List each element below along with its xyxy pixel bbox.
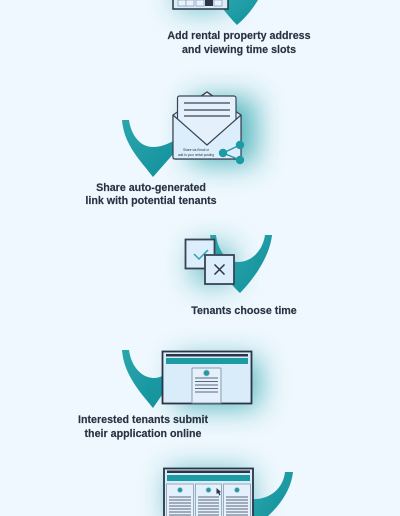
- heading 1: Add rental property address: [167, 30, 311, 42]
- icon: browser with three applicants: [164, 468, 253, 516]
- icon: cursor: [216, 488, 221, 496]
- icon: envelope: [173, 92, 244, 164]
- heading 3: Tenants choose time: [191, 305, 297, 317]
- heading 4: their application online: [85, 428, 202, 440]
- step 4: application: [78, 350, 260, 440]
- icon: calendar monitor: [173, 0, 228, 9]
- heading 4: Interested tenants submit: [78, 414, 208, 426]
- glow 5: [168, 470, 252, 516]
- glow 1: [176, 0, 228, 10]
- glow 2: [190, 98, 256, 164]
- step 5: review applications: [164, 468, 293, 516]
- icon: envelope: Share via Email or: [183, 148, 210, 152]
- glow 4: [176, 358, 260, 408]
- icon: teal swoosh 4: [122, 350, 164, 408]
- icon: teal swoosh 5: [252, 472, 293, 516]
- step 3: choose time: [186, 235, 297, 317]
- icon: check box: [186, 240, 214, 268]
- icon: teal swoosh 3: [210, 235, 272, 293]
- icon: teal swoosh 1: [214, 0, 258, 25]
- icon: teal swoosh 2: [122, 120, 175, 177]
- icon: browser window: [162, 352, 252, 404]
- glow 3: [192, 245, 234, 285]
- heading 2: link with potential tenants: [85, 195, 217, 207]
- icon: share nodes: [219, 141, 244, 164]
- icon: envelope: add to your rental posting: [178, 153, 214, 157]
- icon: cross box: [205, 255, 234, 284]
- heading 1: and viewing time slots: [182, 44, 296, 56]
- step 2: share link: [85, 92, 256, 207]
- step 1: rental address: [167, 0, 311, 56]
- heading 2: Share auto-generated: [96, 182, 206, 194]
